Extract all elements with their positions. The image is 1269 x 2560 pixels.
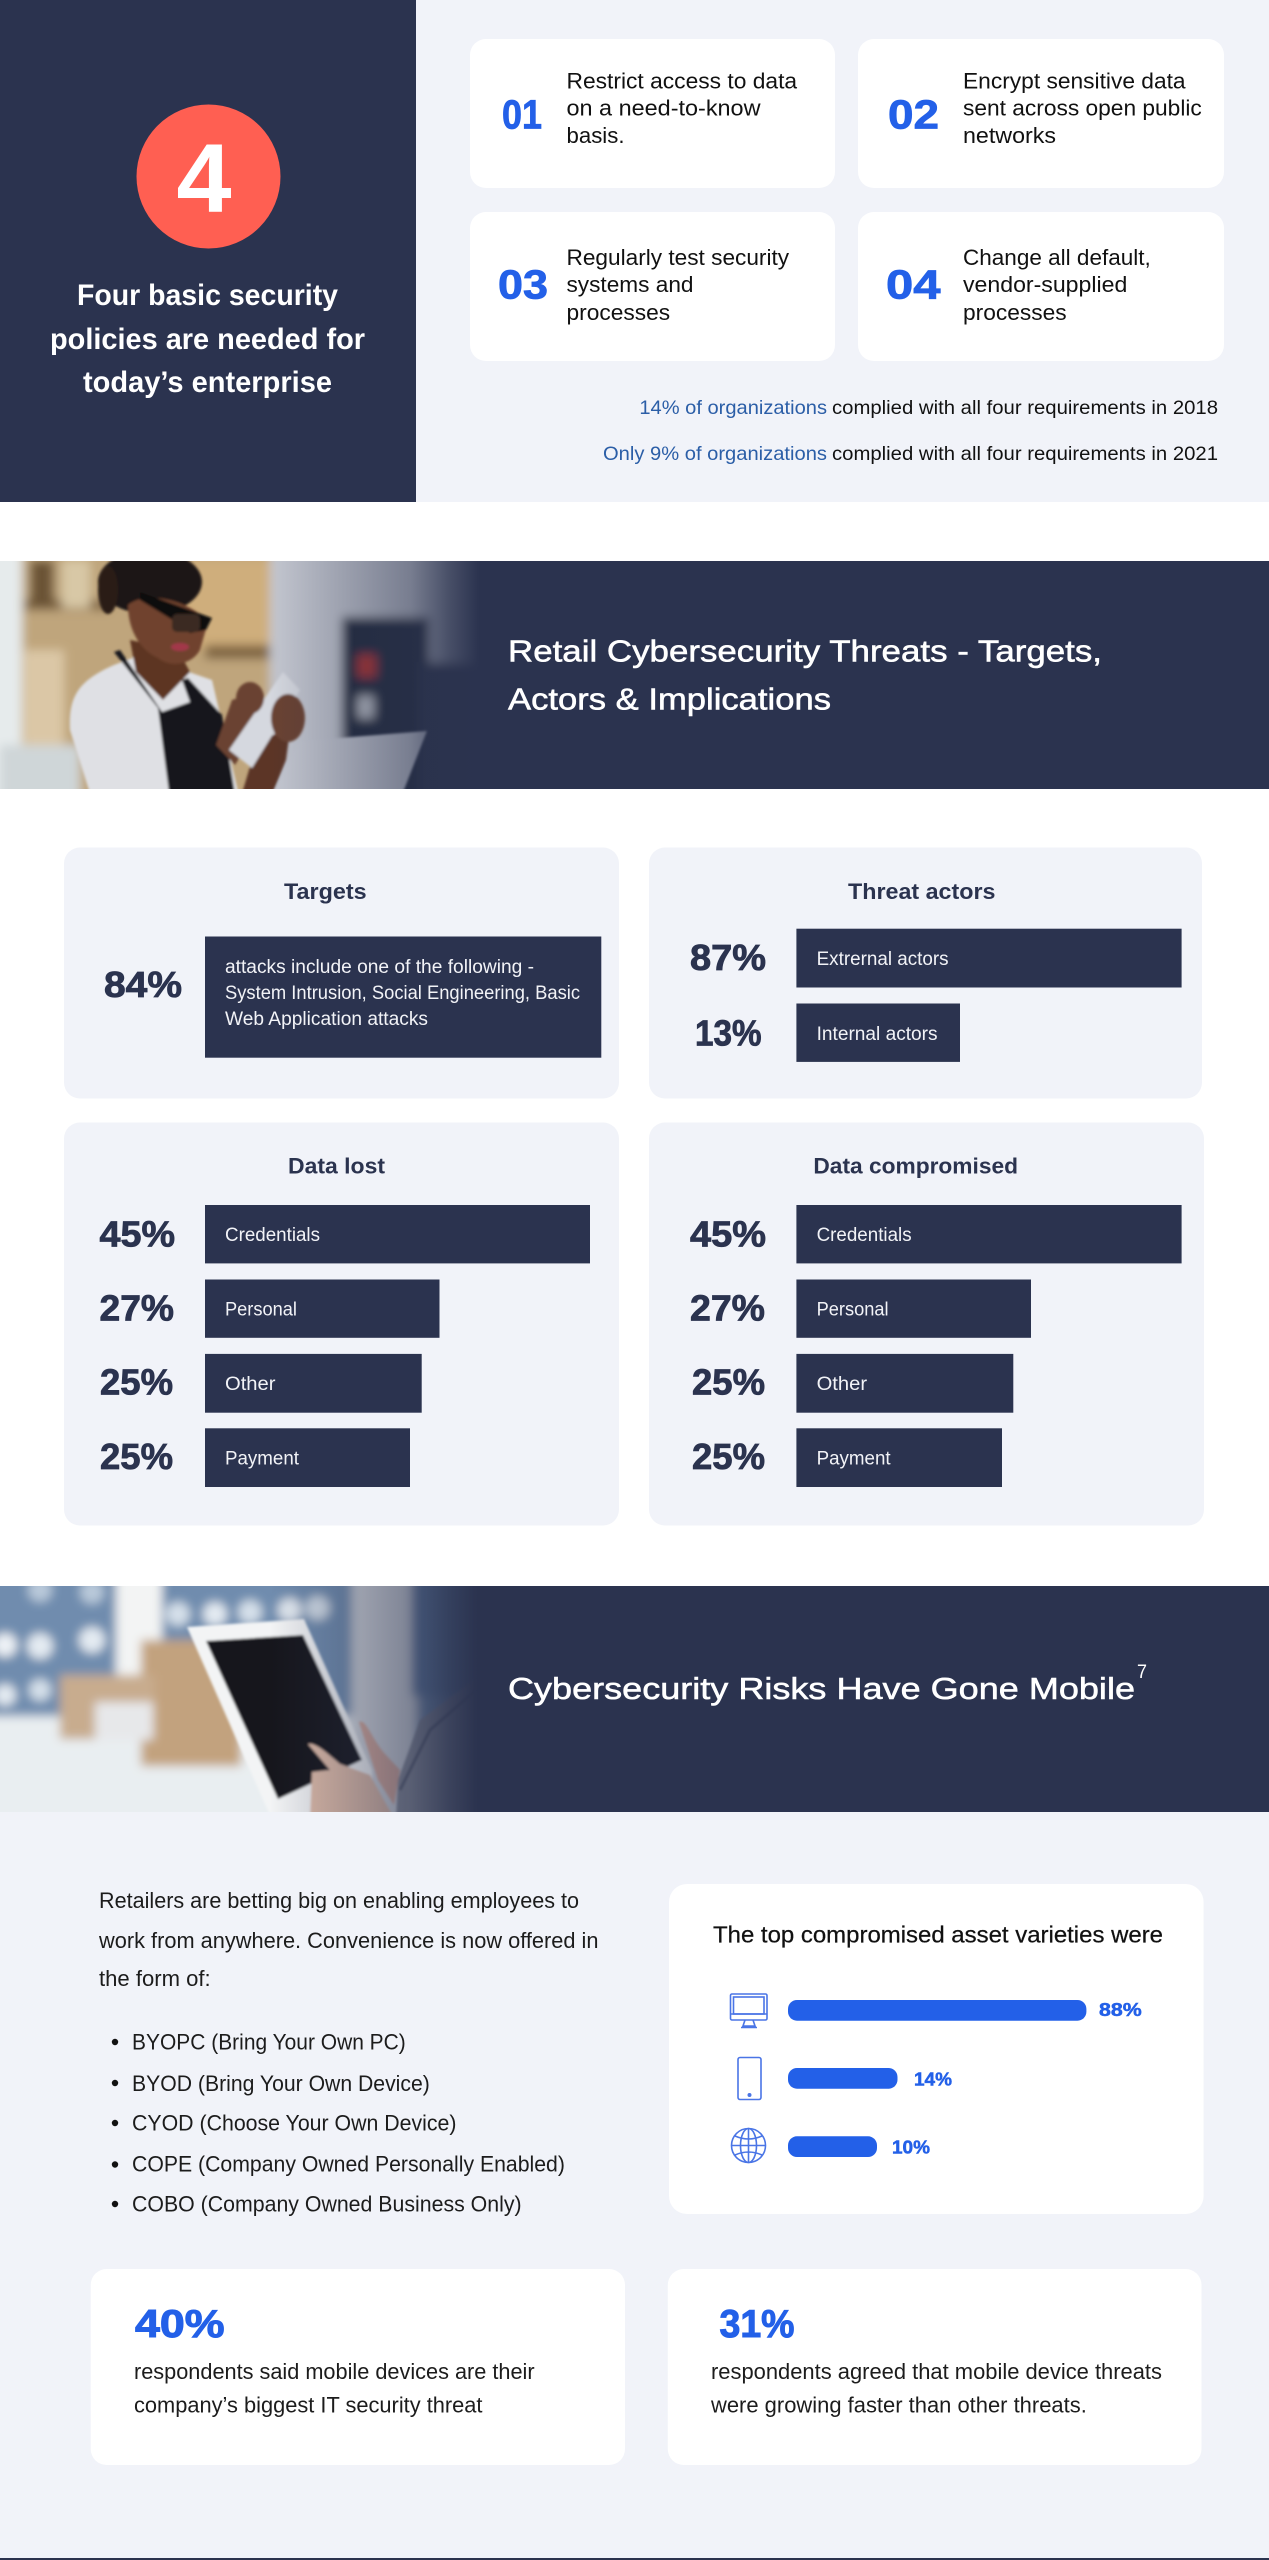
bar: payment 25%: 25% xyxy=(692,1436,765,1477)
text: compliance 2021 xyxy=(603,443,1218,465)
bar: credentials 45%: 45% xyxy=(690,1213,766,1254)
bar: credentials 45%: 45% xyxy=(100,1213,175,1254)
heading: four basic security policies: Four basic security xyxy=(77,279,339,312)
text: compliance 2018: complied with all four requirements in 2018 xyxy=(832,397,1218,419)
card: policy 02: 02 xyxy=(888,92,939,138)
banner: retail cybersecurity threats xyxy=(0,561,1269,789)
text: compliance 2021: complied with all four requirements in 2021 xyxy=(832,443,1218,465)
bar: payment 25%: Payment xyxy=(817,1448,891,1470)
list: device policies xyxy=(112,2030,565,2216)
card: policy 02: sent across open public xyxy=(963,96,1202,120)
card: policy 04: Change all default, xyxy=(963,245,1151,270)
panel: top compromised assets chart xyxy=(669,1884,1204,2214)
card: policy 03: processes xyxy=(566,300,670,325)
card: policy 03: Regularly test security xyxy=(566,245,790,270)
bar: external actors 87%: Extrernal actors xyxy=(817,949,949,970)
list: device policies: COBO (Company Owned Business Only) xyxy=(132,2191,522,2216)
list: device policies: BYOD (Bring Your Own Device) xyxy=(132,2071,430,2096)
paragraph: convenience: the form of: xyxy=(99,1966,211,1991)
bar: internal actors 13%: 13% xyxy=(695,1012,762,1054)
card: policy 01: 01 xyxy=(502,92,542,138)
banner: cybersecurity risks mobile xyxy=(0,1586,1269,1812)
bar: credentials 45% xyxy=(690,1205,1182,1263)
footer strip xyxy=(0,2558,1269,2560)
card: stat 31%: were growing faster than other threats. xyxy=(710,2393,1087,2418)
text: compliance 2018 xyxy=(639,397,1218,419)
bar: credentials 45% xyxy=(100,1205,590,1263)
bar: credentials 45%: Credentials xyxy=(817,1225,912,1246)
bar: internal actors 13%: Internal actors xyxy=(817,1024,938,1045)
card: policy 02: Encrypt sensitive data xyxy=(963,68,1186,94)
bar: personal 27% xyxy=(100,1280,440,1338)
notepad xyxy=(229,672,300,768)
card: stat 31% xyxy=(668,2269,1202,2465)
card: policy 04: vendor-supplied xyxy=(963,272,1127,297)
bar: external actors 87%: 87% xyxy=(690,937,766,978)
panel: targets: Targets xyxy=(284,879,367,904)
heading: mobile banner title xyxy=(508,1662,1147,1706)
card: policy 03: 03 xyxy=(498,262,548,308)
pointing hand xyxy=(308,1744,395,1820)
icon: red circle with number 4: 4 xyxy=(176,124,232,232)
panel: targets: 84% xyxy=(104,964,182,1005)
bar: other 25%: Other xyxy=(225,1374,276,1395)
terminal xyxy=(273,730,428,789)
card: stat 40%: company’s biggest IT security threat xyxy=(134,2393,482,2418)
lips xyxy=(171,643,189,651)
card: policy 04: 04 xyxy=(886,262,941,308)
card: stat 40%: respondents said mobile devices are their xyxy=(134,2359,535,2384)
icon: mobile phone xyxy=(738,2058,761,2100)
heading: retail banner title xyxy=(508,634,1102,716)
photo: retail worker with notepad xyxy=(0,561,470,789)
card: policy 03: systems and xyxy=(566,272,694,297)
heading: four basic security policies: today’s enterprise xyxy=(83,366,332,399)
row: web 10%: 10% xyxy=(892,2136,930,2158)
row: desktop 88%: 88% xyxy=(1099,1999,1142,2020)
tablet frame xyxy=(187,1619,375,1820)
icon: globe xyxy=(732,2128,766,2162)
page background: mobile section xyxy=(0,1812,1269,2558)
heading: four basic security policies: policies are needed for xyxy=(50,323,365,356)
bar: personal 27%: Personal xyxy=(225,1300,297,1320)
bar: other 25%: 25% xyxy=(692,1361,765,1402)
card: stat 40%: 40% xyxy=(135,2303,225,2346)
panel: threat actors: Threat actors xyxy=(848,879,996,904)
card: policy 01: on a need-to-know xyxy=(566,96,761,120)
bar: other 25%: 25% xyxy=(100,1361,173,1402)
bar: attacks text: attacks include one of the following - xyxy=(225,957,534,978)
photo: hand using tablet xyxy=(0,1586,463,1812)
bar: external actors 87% xyxy=(690,929,1182,988)
text block: intro paragraph and list xyxy=(98,1888,598,2216)
panel: data lost: Data lost xyxy=(288,1153,386,1178)
heading: retail banner title: Actors & Implications xyxy=(508,682,831,716)
tablet screen xyxy=(206,1635,362,1799)
heading: mobile banner title: 7 xyxy=(1137,1662,1147,1683)
text: compliance 2018: 14% of organizations xyxy=(639,397,827,419)
overlay gradient xyxy=(270,561,490,789)
heading: mobile banner title: Cybersecurity Risks Have Gone Mobile xyxy=(508,1671,1135,1706)
bar: other 25% xyxy=(100,1354,422,1413)
neck xyxy=(130,640,190,700)
bar: attacks text: System Intrusion, Social Engineering, Basic xyxy=(225,983,580,1004)
paragraph: convenience xyxy=(98,1888,598,1991)
grey sweater xyxy=(396,1718,430,1812)
bar: personal 27%: 27% xyxy=(100,1287,174,1328)
icon: desktop monitor xyxy=(730,1994,767,2028)
apron xyxy=(114,650,236,800)
bar: personal 27%: Personal xyxy=(817,1300,889,1320)
far hand xyxy=(359,1722,400,1805)
bar: payment 25%: 25% xyxy=(100,1436,173,1477)
glasses xyxy=(140,592,212,633)
bar: payment 25% xyxy=(692,1428,1002,1487)
panel: threat actors xyxy=(649,848,1202,1098)
card: stat 31%: 31% xyxy=(720,2303,794,2346)
paragraph: convenience: work from anywhere. Convenience is now offered in xyxy=(98,1928,598,1953)
panel: data compromised: Data compromised xyxy=(813,1153,1018,1178)
list: device policies: CYOD (Choose Your Own Device) xyxy=(132,2110,456,2136)
hair xyxy=(96,561,204,612)
card: policy 02: networks xyxy=(963,123,1056,148)
card: policy 01: Restrict access to data xyxy=(566,68,798,94)
row: mobile 14%: 14% xyxy=(914,2068,952,2090)
heading: retail banner title: Retail Cybersecurity Threats - Targets, xyxy=(508,634,1102,668)
bar: personal 27%: 27% xyxy=(690,1287,765,1328)
paragraph: convenience: Retailers are betting big on enabling employees to xyxy=(99,1888,579,1913)
panel: left navy intro xyxy=(0,0,416,502)
bar: other 25%: Other xyxy=(817,1374,868,1395)
list: device policies: COPE (Company Owned Personally Enabled) xyxy=(132,2152,565,2177)
panel: targets xyxy=(64,848,619,1098)
list: device policies: BYOPC (Bring Your Own PC) xyxy=(132,2030,406,2055)
panel: top compromised assets chart: The top compromised asset varieties were xyxy=(713,1922,1163,1948)
card: policy 01: basis. xyxy=(566,123,624,148)
face xyxy=(128,598,208,664)
card: policy 02 xyxy=(858,39,1224,188)
heading: four basic security policies xyxy=(50,279,365,399)
row: desktop 88% xyxy=(730,1994,1142,2028)
card: policy 04 xyxy=(858,212,1224,361)
hands xyxy=(271,694,305,742)
panel: data lost xyxy=(64,1122,619,1526)
panel: data compromised xyxy=(649,1122,1204,1526)
row: web 10% xyxy=(732,2128,930,2162)
bar: credentials 45%: Credentials xyxy=(225,1225,320,1246)
card: policy 01 xyxy=(470,39,835,188)
text: compliance 2021: Only 9% of organizations xyxy=(603,443,827,465)
row: mobile 14% xyxy=(738,2058,952,2100)
forearm left xyxy=(214,698,255,766)
sweater fold xyxy=(399,1719,443,1790)
bar: other 25% xyxy=(692,1354,1013,1413)
card: stat 31%: respondents agreed that mobile device threats xyxy=(711,2359,1162,2384)
forearm right xyxy=(242,733,290,789)
bar: internal actors 13% xyxy=(695,1004,960,1062)
icon: red circle with number 4 xyxy=(136,104,280,248)
card: policy 03 xyxy=(470,212,835,361)
bar: payment 25% xyxy=(100,1428,410,1487)
card: stat 40% xyxy=(91,2269,625,2465)
bar: personal 27% xyxy=(690,1280,1031,1338)
card: policy 04: processes xyxy=(963,300,1067,325)
bar: attacks text xyxy=(205,936,601,1058)
section: four security policies xyxy=(0,0,1269,502)
shirt xyxy=(70,655,240,800)
bar: payment 25%: Payment xyxy=(225,1448,300,1470)
overlay gradient xyxy=(270,1586,488,1812)
bar: attacks text: Web Application attacks xyxy=(225,1009,428,1030)
